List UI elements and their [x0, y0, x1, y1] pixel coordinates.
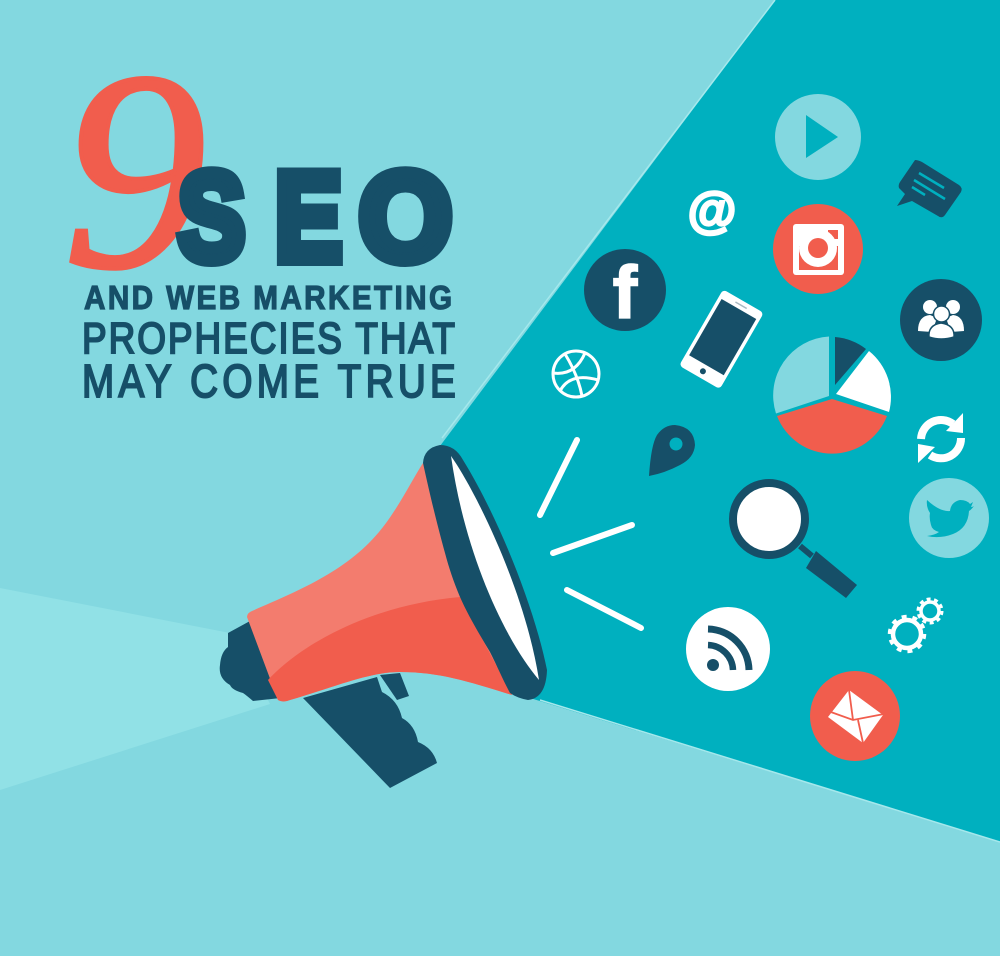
- icon: facebook: [584, 249, 666, 334]
- icon: instagram: [773, 204, 863, 294]
- icon: rss: [686, 607, 770, 691]
- icon: at sign: @: [688, 182, 736, 238]
- megaphone: [220, 445, 547, 788]
- subtitle line 2: PROPHECIES THAT: [82, 313, 455, 363]
- megaphone opening: [451, 456, 539, 680]
- megaphone trigger: [380, 673, 409, 700]
- icon: gears: [890, 599, 942, 652]
- icon: speech bubble: [897, 160, 962, 217]
- title: [63, 14, 456, 407]
- icon: twitter: [909, 478, 989, 558]
- megaphone rim: [423, 445, 547, 700]
- subtitle line 1: AND WEB MARKETING: [84, 280, 452, 316]
- megaphone handle: [303, 677, 437, 788]
- megaphone body: [247, 463, 512, 702]
- title word SEO: E: [275, 148, 342, 287]
- icon: smartphone: [679, 289, 764, 389]
- megaphone back cap: [220, 621, 290, 701]
- icon: dribbble: [553, 351, 599, 397]
- sound rays: [540, 440, 641, 628]
- icon: magnifying glass: [733, 483, 857, 598]
- icon: sync arrows: [918, 413, 963, 463]
- icon: group of people: [900, 279, 982, 361]
- icon: play: [775, 94, 861, 180]
- subtitle line 3: MAY COME TRUE: [82, 356, 456, 407]
- icon: map pin: [649, 425, 695, 476]
- title numeral 9: 9: [63, 14, 206, 328]
- chart: pie: [773, 336, 891, 454]
- title word SEO: S: [178, 148, 245, 287]
- title word SEO: O: [359, 148, 452, 287]
- megaphone body shadow: [268, 597, 512, 702]
- panel: teal sound beam: [440, 0, 1000, 842]
- icon: facebook: f: [613, 251, 638, 334]
- icon: envelope: [810, 671, 900, 761]
